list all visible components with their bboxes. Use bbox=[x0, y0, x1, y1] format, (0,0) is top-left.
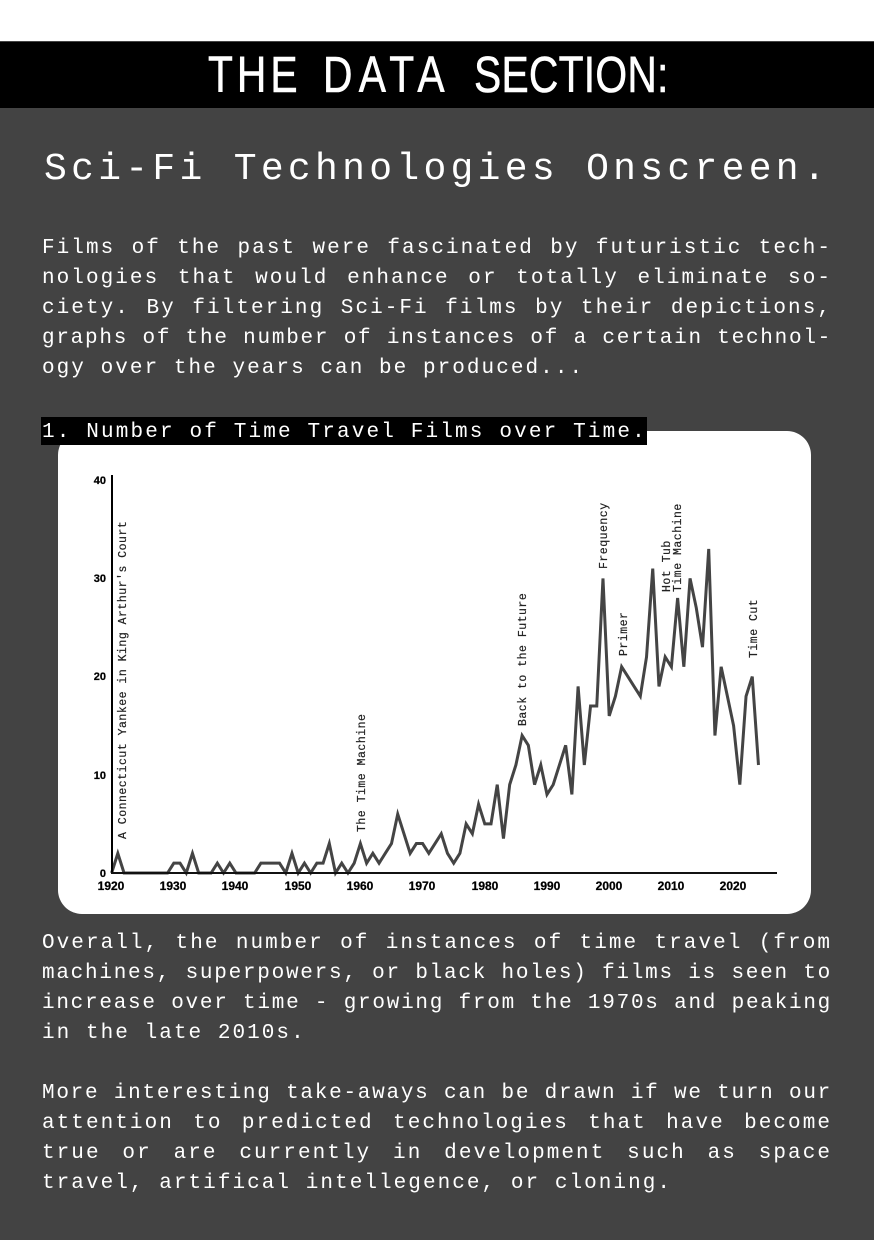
x axis labels: 1950 bbox=[285, 879, 312, 893]
x axis labels: 2010 bbox=[658, 879, 685, 893]
y axis labels bbox=[94, 475, 106, 880]
y axis labels: 20 bbox=[94, 671, 106, 683]
y axis labels: 30 bbox=[94, 573, 106, 585]
x axis labels bbox=[98, 879, 747, 893]
x axis labels: 1980 bbox=[472, 879, 499, 893]
intro text block: graphs of the number of instances of a certain technol- bbox=[42, 327, 832, 350]
x axis labels: 1940 bbox=[222, 879, 249, 893]
x axis labels: 1930 bbox=[160, 879, 187, 893]
conclusion text block bbox=[42, 932, 832, 1045]
x axis labels: 1970 bbox=[409, 879, 436, 893]
conclusion text block: in the late 2010s. bbox=[42, 1022, 306, 1045]
x axis labels: 2020 bbox=[720, 879, 747, 893]
film annotations: The Time Machine bbox=[356, 714, 369, 832]
x axis labels: 2000 bbox=[596, 879, 623, 893]
conclusion text block: increase over time - growing from the 1970s and peaking bbox=[42, 992, 832, 1015]
film annotations: Time Machine bbox=[672, 503, 685, 592]
chart card bbox=[58, 431, 811, 914]
intro text block: nologies that would enhance or totally eliminate so- bbox=[42, 267, 832, 290]
y axis labels: 10 bbox=[94, 770, 106, 782]
intro text block: ogy over the years can be produced... bbox=[42, 357, 584, 380]
title banner bbox=[0, 41, 874, 108]
closing text block: attention to predicted technologies that have become bbox=[42, 1112, 832, 1135]
film annotations: Frequency bbox=[598, 502, 611, 569]
closing text block bbox=[42, 1082, 832, 1195]
closing text block: travel, artifical intellegence, or cloning. bbox=[42, 1172, 672, 1195]
film annotations bbox=[117, 502, 761, 839]
intro text block bbox=[42, 237, 832, 380]
intro text block: Films of the past were fascinated by futuristic tech- bbox=[42, 237, 832, 260]
chart heading label: 1. Number of Time Travel Films over Time. bbox=[42, 421, 647, 444]
data line bbox=[112, 549, 758, 873]
y axis labels: 40 bbox=[94, 475, 106, 487]
film annotations: Back to the Future bbox=[517, 593, 530, 726]
closing text block: More interesting take-aways can be drawn if we turn our bbox=[42, 1082, 832, 1105]
x axis bbox=[111, 872, 777, 874]
line chart: number of time travel films bbox=[94, 475, 777, 893]
conclusion text block: machines, superpowers, or black holes) films is seen to bbox=[42, 962, 832, 985]
x axis labels: 1960 bbox=[347, 879, 374, 893]
conclusion text block: Overall, the number of instances of time travel (from bbox=[42, 932, 832, 955]
film annotations: A Connecticut Yankee in King Arthur's Court bbox=[117, 521, 130, 839]
y axis bbox=[111, 475, 113, 874]
x axis labels: 1990 bbox=[534, 879, 561, 893]
title: THE bbox=[208, 46, 298, 103]
title: DATA bbox=[323, 46, 445, 103]
film annotations: Time Cut bbox=[748, 599, 761, 658]
film annotations: Hot Tub bbox=[661, 540, 674, 592]
y axis labels: 0 bbox=[100, 868, 106, 880]
heading: Sci-Fi Technologies Onscreen. bbox=[44, 148, 830, 191]
intro text block: ciety. By filtering Sci-Fi films by their depictions, bbox=[42, 297, 832, 320]
closing text block: true or are currently in development such as space bbox=[42, 1142, 832, 1165]
film annotations: Primer bbox=[618, 612, 631, 656]
title bbox=[208, 46, 668, 103]
x axis labels: 1920 bbox=[98, 879, 125, 893]
title: SECTION: bbox=[474, 46, 668, 103]
